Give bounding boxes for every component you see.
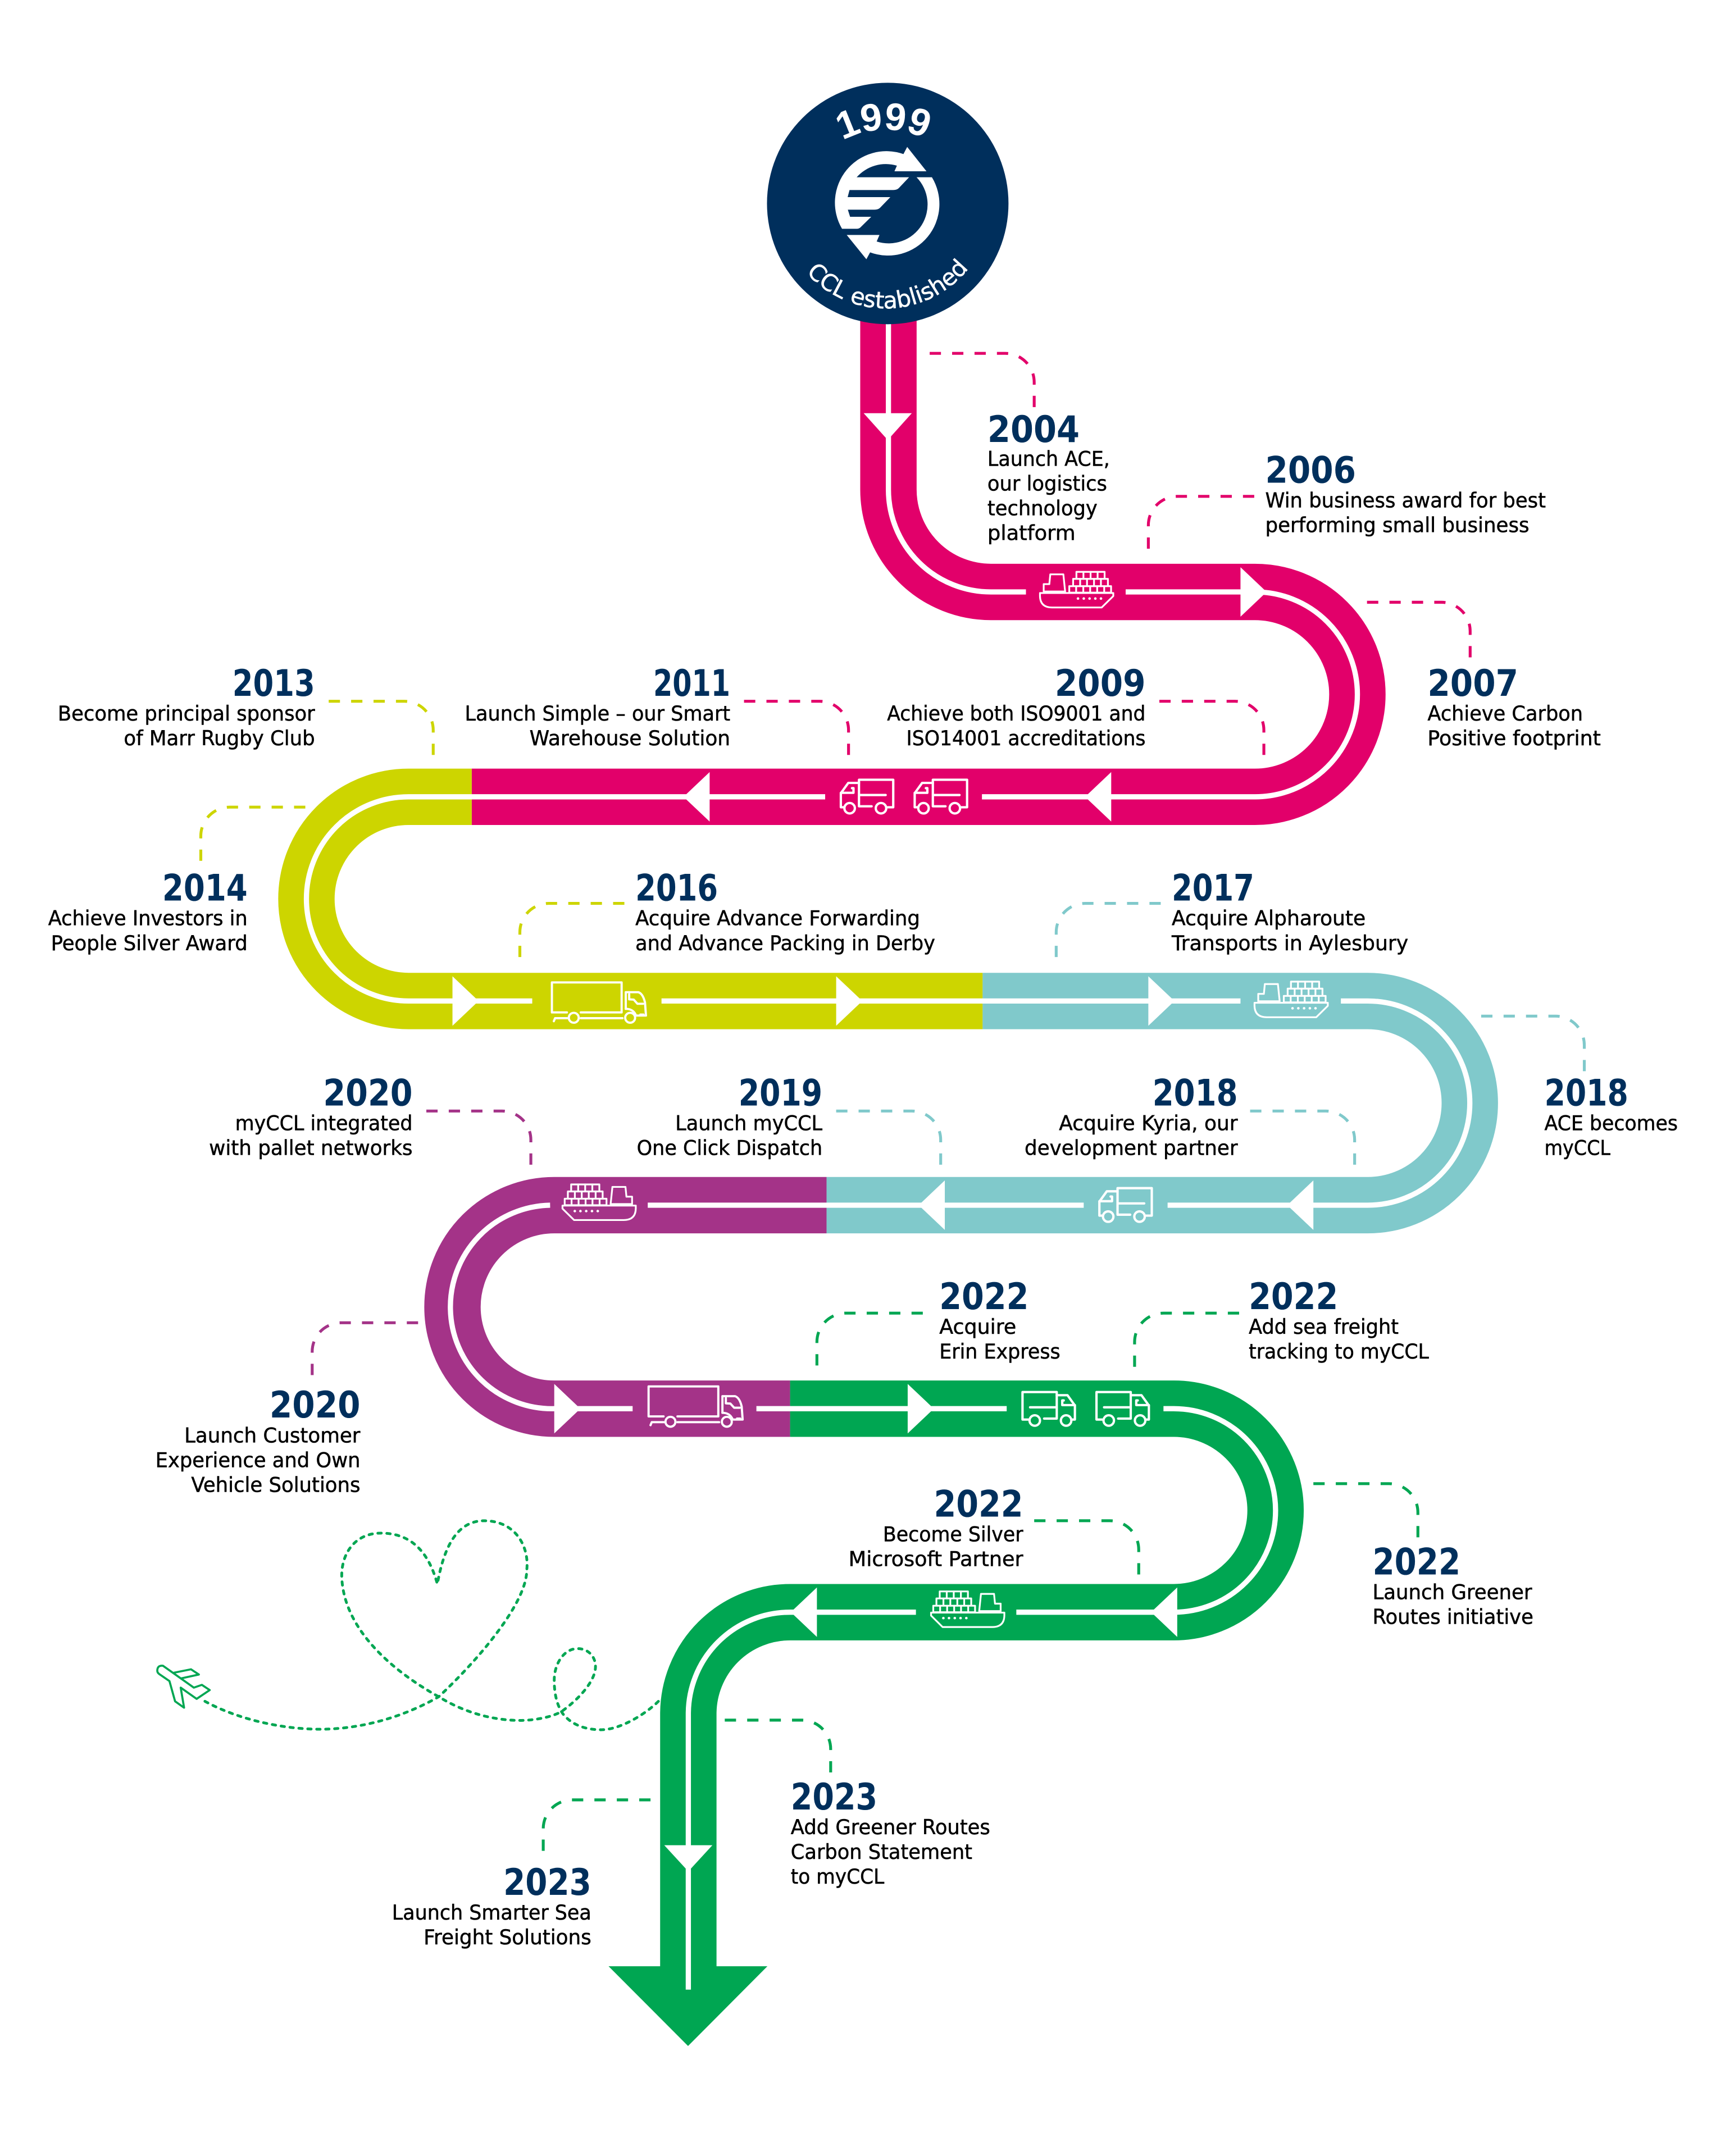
milestone: 2004 (930, 353, 1110, 545)
description: Vehicle Solutions (191, 1473, 360, 1497)
year: 2013 (233, 663, 315, 705)
description (987, 446, 1110, 545)
year: 2014 (162, 868, 248, 910)
connector (725, 1720, 831, 1778)
description: Become principal sponsor (58, 701, 315, 726)
icon: ship 4 (931, 1592, 1004, 1627)
road segment: lime (307, 797, 982, 1001)
milestone: 2011 (465, 663, 849, 758)
year: 2018 (1545, 1072, 1628, 1114)
icon: van 5 (1096, 1392, 1149, 1426)
description (1545, 1111, 1678, 1160)
description (1372, 1580, 1533, 1629)
description: Win business award for best (1265, 488, 1546, 512)
description (1265, 488, 1546, 537)
year: 2006 (1265, 449, 1356, 491)
connector (1481, 1016, 1585, 1074)
road segment: purple (453, 1205, 826, 1409)
description: Warehouse Solution (530, 726, 730, 750)
description: to myCCL (791, 1865, 884, 1889)
year: 2019 (739, 1072, 822, 1114)
description (887, 701, 1145, 750)
milestone: 2018 ACE becomes myCCL (1481, 1016, 1678, 1160)
description: Launch Greener (1372, 1580, 1532, 1604)
milestone: 2022 Greener Routes (1313, 1484, 1533, 1629)
description (1249, 1315, 1429, 1364)
description (637, 1111, 822, 1160)
year: 2022 (1249, 1276, 1338, 1318)
description: of Marr Rugby Club (124, 726, 315, 750)
description: Acquire (939, 1315, 1016, 1339)
description: performing small business (1265, 513, 1530, 537)
description: Erin Express (939, 1339, 1061, 1364)
icon: van 3 (1099, 1188, 1152, 1222)
connector (520, 904, 625, 960)
description (635, 906, 935, 955)
connector (817, 1313, 923, 1370)
connector (201, 807, 306, 865)
connector (1250, 1111, 1355, 1168)
road: winding timeline (307, 320, 1470, 2046)
description (1427, 701, 1601, 750)
description: Acquire Alpharoute (1172, 906, 1366, 931)
year: 2022 (939, 1276, 1028, 1318)
description: ISO14001 accreditations (906, 726, 1145, 750)
description: tracking to myCCL (1249, 1339, 1429, 1364)
description: Positive footprint (1427, 726, 1601, 750)
year: 2009 (1055, 663, 1145, 705)
icon: van 1 (914, 780, 967, 813)
description: Achieve Investors in (48, 906, 248, 931)
milestone: 2019 (637, 1072, 941, 1168)
connector (1135, 1313, 1239, 1370)
milestone: 2009 (887, 663, 1264, 758)
description: Achieve Carbon (1427, 701, 1583, 726)
milestone: 2017 (1056, 868, 1408, 960)
year: 2023 (791, 1776, 877, 1818)
description: Add sea freight (1249, 1315, 1399, 1339)
description: Experience and Own (156, 1448, 360, 1472)
connector (1056, 904, 1160, 960)
road segment: pink (472, 320, 1358, 797)
icon: lorry 1 (552, 982, 646, 1023)
description (48, 906, 248, 955)
connector (930, 353, 1034, 410)
milestone: 2022 Microsoft Partner (849, 1484, 1139, 1577)
milestone: 2023 Carbon Statement (725, 1720, 990, 1889)
year: 2004 (987, 409, 1080, 451)
milestone: 2007 (1367, 602, 1601, 750)
description (1171, 906, 1408, 955)
year: 2022 (934, 1484, 1023, 1526)
year: 2011 (653, 663, 730, 705)
description: myCCL integrated (235, 1111, 413, 1136)
description (392, 1900, 591, 1949)
milestone: 2020 pallet networks (209, 1072, 531, 1168)
description: myCCL (1545, 1136, 1610, 1160)
connector (1148, 496, 1254, 553)
description (465, 701, 730, 750)
road segment: green (688, 1409, 1276, 1968)
description: platform (987, 521, 1076, 545)
year: 2016 (635, 868, 718, 910)
milestone: 2006 (1148, 449, 1546, 553)
connector (543, 1800, 650, 1856)
description (849, 1523, 1023, 1571)
description: Microsoft Partner (849, 1547, 1023, 1571)
arrowhead: road end (608, 1966, 767, 2046)
description: Launch Customer (184, 1423, 361, 1447)
description (156, 1423, 361, 1497)
description (939, 1315, 1061, 1364)
year: 2007 (1427, 663, 1518, 705)
description: Transports in Aylesbury (1171, 931, 1408, 955)
milestone: 2020 customer experience (156, 1323, 418, 1497)
description: development partner (1025, 1136, 1238, 1160)
icon: ship 2 (1254, 982, 1328, 1017)
description: Freight Solutions (424, 1925, 591, 1949)
badge year: 1999 (836, 103, 930, 139)
description (209, 1111, 413, 1160)
flight path: dotted heart trail (205, 1521, 662, 1730)
milestone: 2016 (520, 868, 935, 960)
badge: 1999 CCL established (767, 83, 1009, 325)
description: Become Silver (883, 1523, 1023, 1547)
milestone: 2023 Smarter Sea (392, 1800, 650, 1949)
direction arrows (453, 413, 1313, 1871)
connector (312, 1323, 418, 1379)
milestone: 2013 (58, 663, 433, 758)
road segment: teal (826, 1001, 1470, 1205)
description: Acquire Advance Forwarding (635, 906, 920, 931)
description: Launch Simple – our Smart (465, 701, 730, 726)
year: 2023 (503, 1862, 591, 1904)
description: technology (987, 496, 1098, 520)
centre line (307, 320, 1470, 1990)
description: Launch myCCL (675, 1111, 822, 1136)
icon: ship 1 (1040, 572, 1113, 608)
description: ACE becomes (1545, 1111, 1678, 1136)
description (791, 1815, 990, 1889)
icon: van 4 (1022, 1392, 1075, 1426)
connector (744, 701, 849, 758)
connector (1367, 602, 1470, 660)
year: 2017 (1172, 868, 1254, 910)
icon: lorry 2 (649, 1387, 743, 1426)
connector (329, 701, 433, 758)
badge caption: CCL established (810, 258, 968, 309)
description: with pallet networks (209, 1136, 413, 1160)
icon: ship 3 (562, 1184, 636, 1220)
description: Launch Smarter Sea (392, 1900, 591, 1925)
description: Routes initiative (1372, 1605, 1533, 1629)
year: 2018 (1153, 1072, 1238, 1114)
connector (426, 1111, 531, 1168)
year: 2020 (323, 1072, 413, 1114)
milestone: 2022 sea freight tracking (1135, 1276, 1429, 1370)
description: People Silver Award (51, 931, 248, 955)
milestone: 2018 Kyria (1025, 1072, 1355, 1168)
description: Acquire Kyria, our (1059, 1111, 1238, 1136)
icon: van 2 (841, 780, 893, 813)
description: our logistics (987, 471, 1107, 495)
milestone: 2014 (48, 807, 306, 955)
description (1025, 1111, 1238, 1160)
connector (1159, 701, 1264, 758)
icon: CCL logo (835, 147, 939, 259)
description: One Click Dispatch (637, 1136, 822, 1160)
year: 2022 (1372, 1541, 1460, 1583)
description: Launch ACE, (987, 446, 1110, 471)
icon: aeroplane (157, 1666, 210, 1708)
connector (836, 1111, 941, 1168)
description (58, 701, 315, 750)
description: Carbon Statement (791, 1840, 972, 1864)
milestone: 2022 Erin Express (817, 1276, 1061, 1370)
connector (1034, 1521, 1139, 1577)
description: Add Greener Routes (791, 1815, 990, 1839)
connector (1313, 1484, 1418, 1540)
year: 2020 (270, 1384, 360, 1426)
description: and Advance Packing in Derby (635, 931, 935, 955)
description: Achieve both ISO9001 and (887, 701, 1145, 726)
